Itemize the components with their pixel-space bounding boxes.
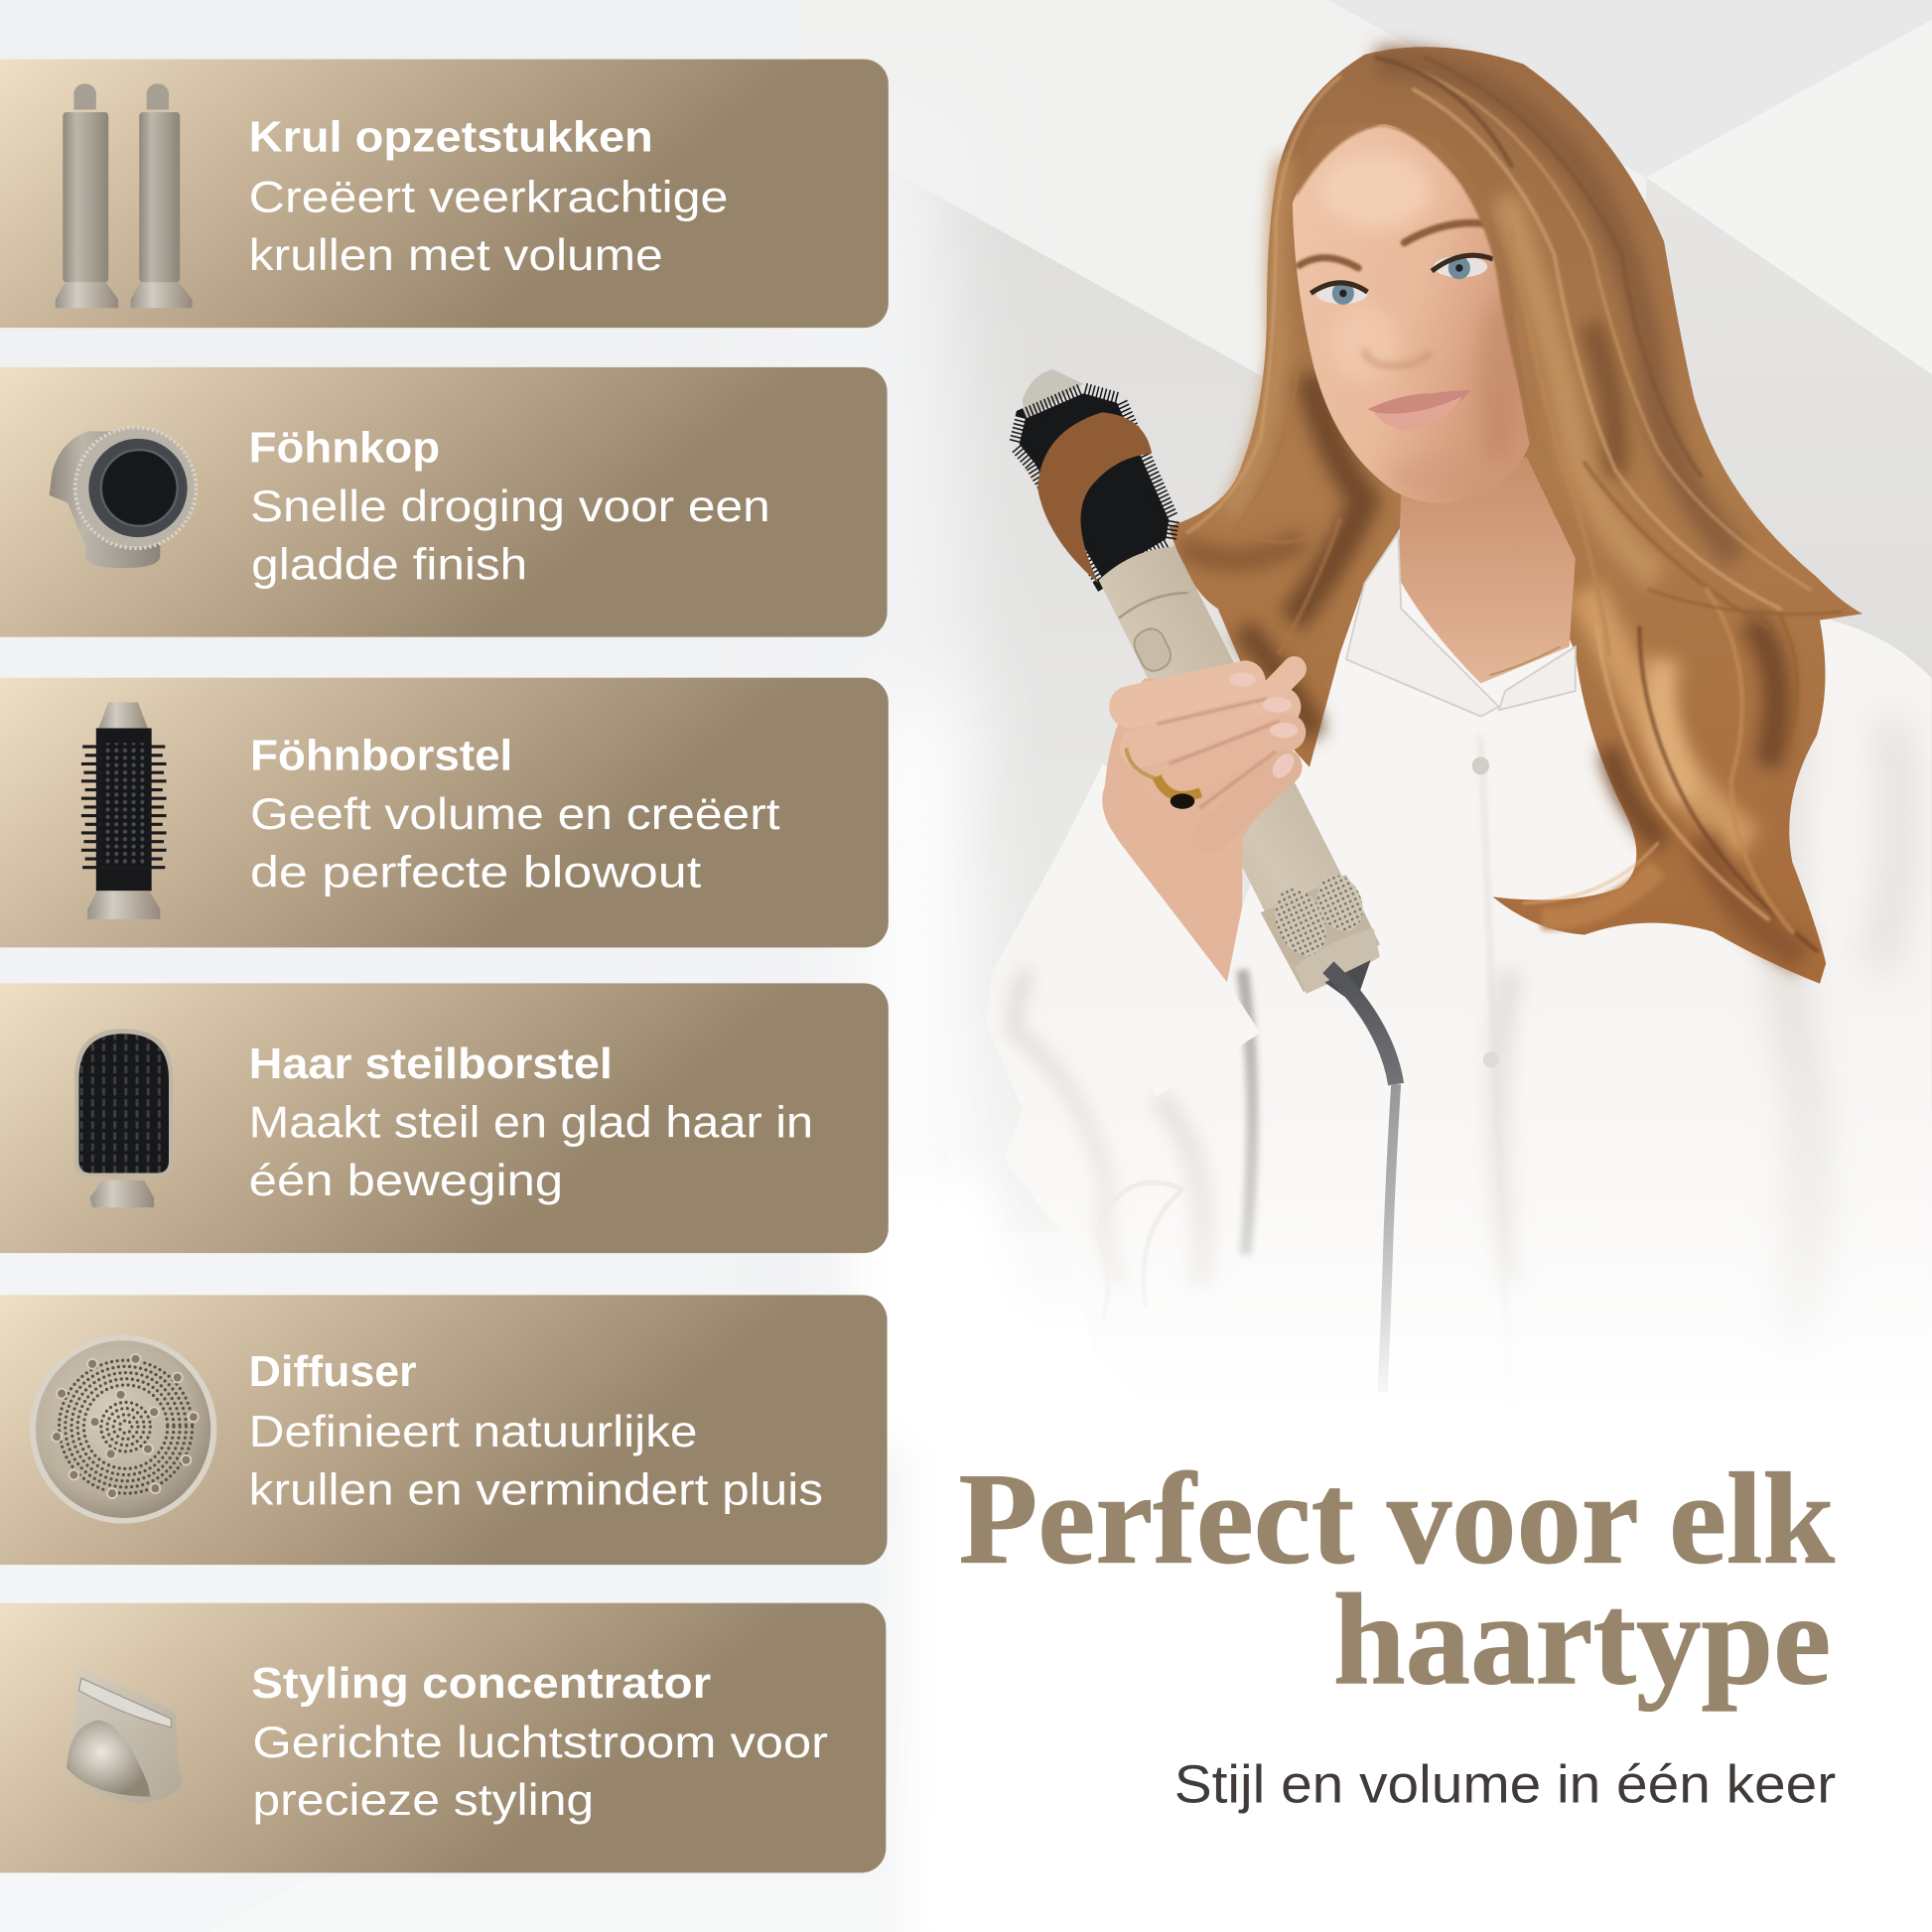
styling wand: [1020, 369, 1380, 1005]
text: Diffuser: [249, 1348, 417, 1396]
photo: woman holding the styling wand: [986, 47, 1932, 1417]
eyes: [1316, 283, 1367, 304]
subtitle: Stijl en volume in één keer: [1174, 1756, 1836, 1815]
hair strands: [1187, 58, 1842, 951]
card 3: round brush: de perfecte blowout: [250, 849, 702, 897]
face: [1293, 124, 1530, 503]
brush cap: [1023, 369, 1083, 420]
neck: [1398, 457, 1576, 683]
brush bristles: [1020, 393, 1169, 577]
card 5: diffuser: krullen en vermindert pluis: [249, 1465, 823, 1514]
soft white fade at left of sleeve: [863, 1182, 1059, 1442]
hair: [1083, 47, 1863, 984]
card 5: diffuser: [0, 1295, 888, 1565]
shirt: [986, 526, 1932, 1417]
card 6: styling concentrator: Gerichte luchtstroom voor: [252, 1719, 828, 1767]
shirt tie strings: [1097, 1182, 1182, 1318]
headline: haartype: [1333, 1568, 1831, 1712]
rings: [1126, 748, 1156, 778]
card 2: blow-dry head: Snelle droging voor een: [250, 483, 770, 531]
headline: Perfect voor elk: [959, 1448, 1835, 1591]
card 4: straightening brush: één beweging: [249, 1157, 563, 1205]
card 3: round brush: Geeft volume en creëert: [250, 790, 780, 839]
power cord: [1328, 967, 1396, 1392]
icon: round brush: [81, 702, 167, 919]
card 2: blow-dry head: gladde finish: [251, 540, 527, 589]
wand body: [1099, 547, 1377, 989]
text: Haar steilborstel: [249, 1040, 613, 1088]
collar: [1346, 533, 1576, 717]
card 6: styling concentrator: precieze styling: [252, 1776, 594, 1825]
icon: straightening brush: [74, 1029, 173, 1207]
icon: blow-dry head: [50, 428, 196, 568]
card 1: curl attachments: Creëert veerkrachtige: [249, 173, 728, 221]
card 3: round brush: [0, 678, 889, 947]
icon: curling barrels: [56, 83, 193, 308]
nose: [1364, 349, 1431, 365]
hair curl around brush: [1037, 412, 1152, 584]
lips: [1367, 390, 1471, 418]
card 2: blow-dry head: [0, 367, 888, 637]
card 6: styling concentrator: [0, 1603, 886, 1872]
eyebrows: [1300, 258, 1358, 268]
text: Föhnkop: [249, 424, 440, 472]
headline: [959, 1448, 1835, 1712]
text: Styling concentrator: [251, 1660, 711, 1708]
hand: [1102, 669, 1299, 982]
necklace: [1490, 646, 1560, 675]
card 1: curl attachments: [0, 60, 889, 328]
card 4: straightening brush: Maakt steil en glad haar in: [249, 1099, 813, 1148]
white fade over lower photo: [949, 986, 1932, 1436]
wand vent: [1261, 875, 1380, 992]
icon: diffuser: [30, 1335, 216, 1524]
icon: styling concentrator: [67, 1669, 183, 1804]
card 5: diffuser: Definieert natuurlijke: [249, 1408, 697, 1456]
card 1: curl attachments: krullen met volume: [249, 231, 663, 280]
hair framing the face: [1296, 123, 1539, 457]
text: Föhnborstel: [250, 733, 512, 780]
wand button: [1130, 624, 1175, 676]
sleeve cuff: [1046, 805, 1261, 1096]
card 4: straightening brush: [0, 983, 889, 1253]
text: Krul opzetstukken: [249, 114, 653, 162]
